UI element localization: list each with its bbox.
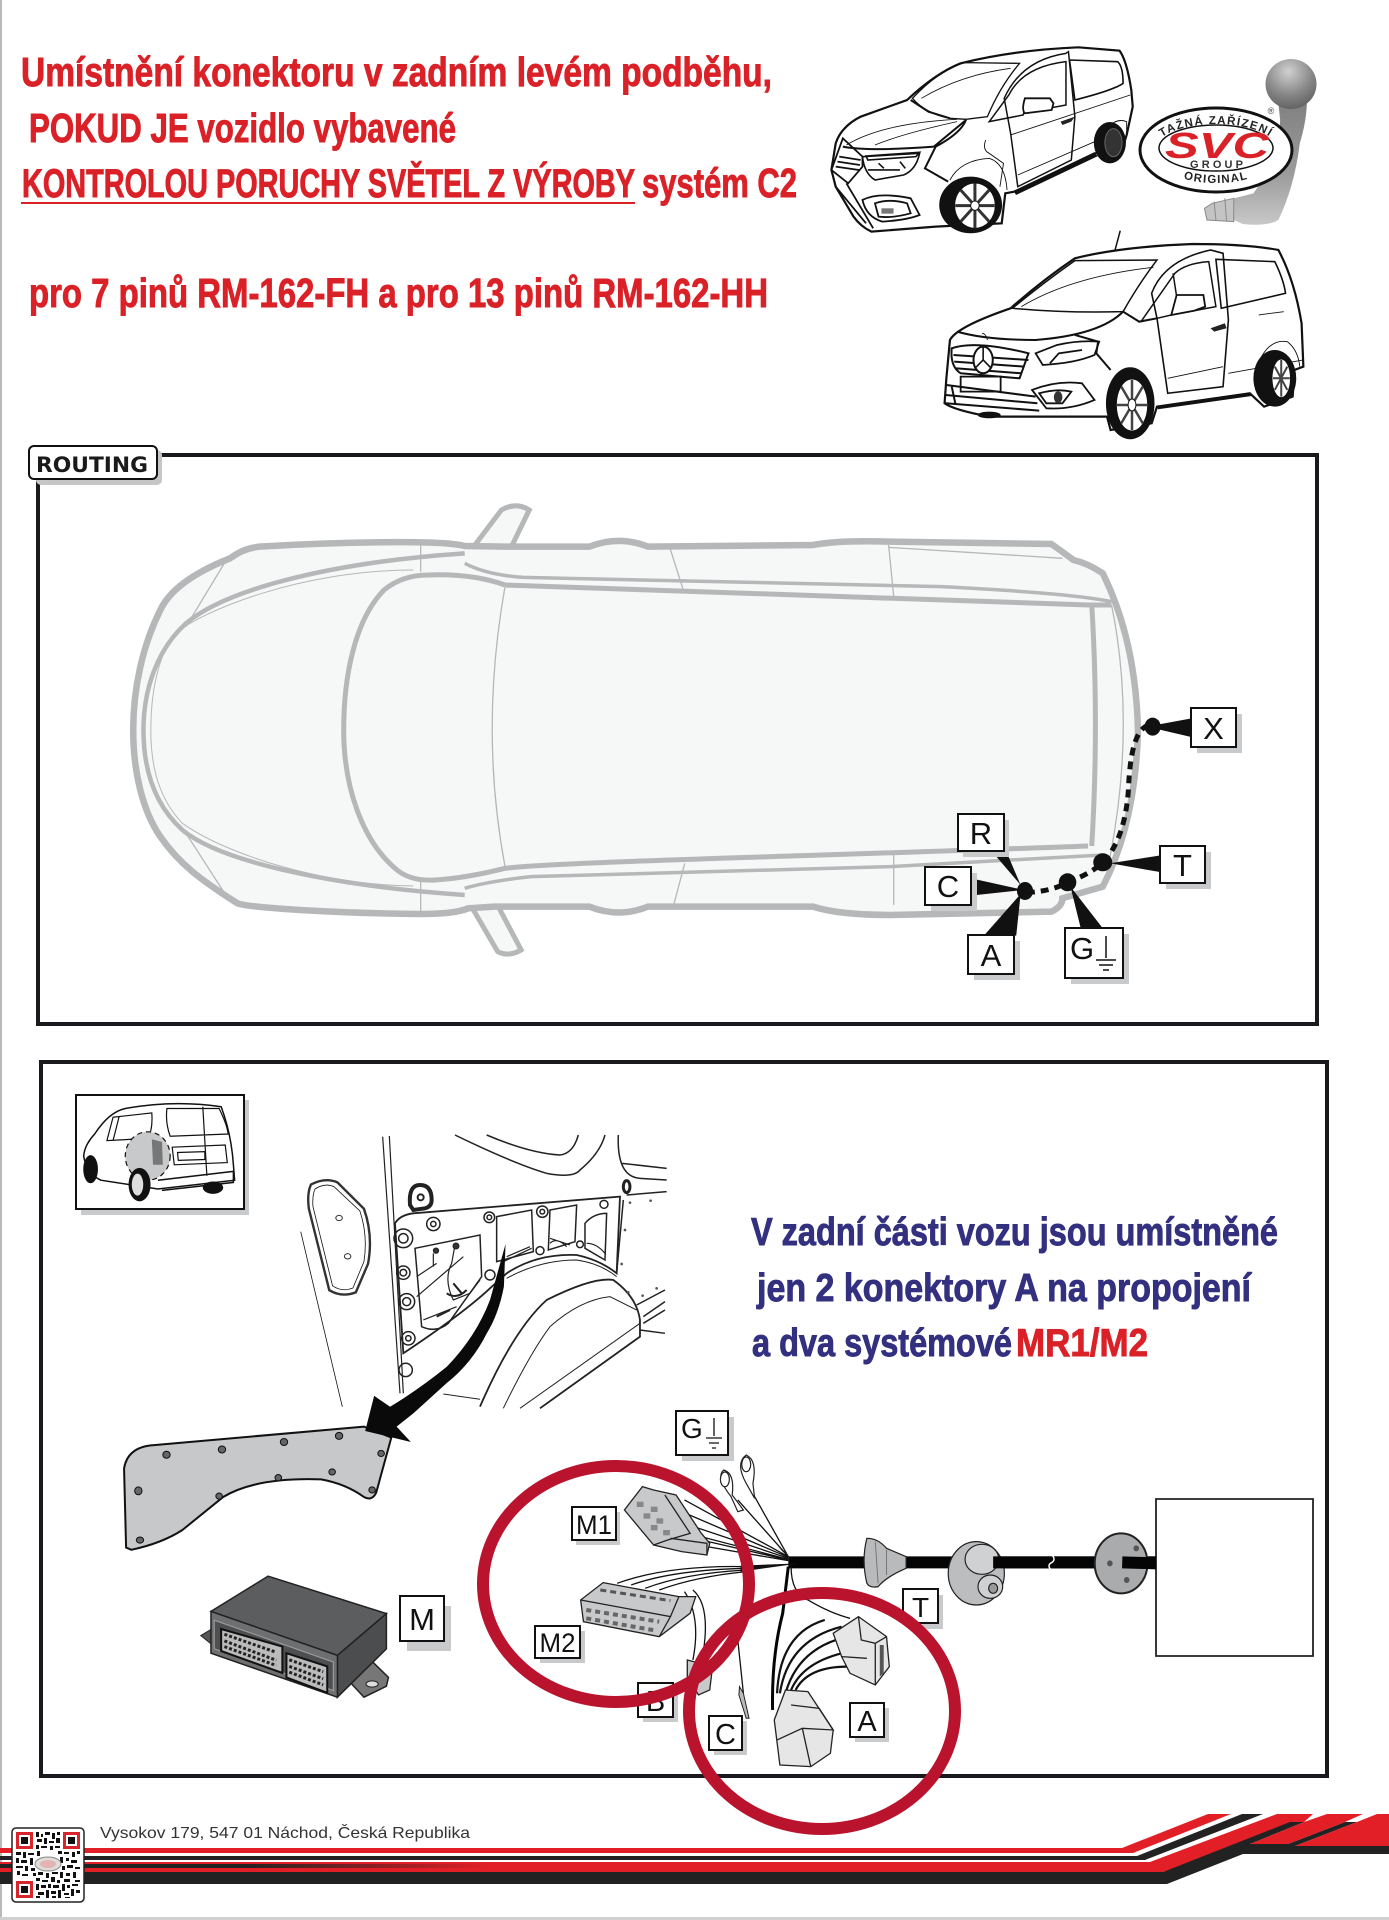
headlamp	[862, 152, 920, 180]
roof panel	[344, 575, 1112, 880]
highlight ellipse: M1 and M2 connectors	[483, 1466, 749, 1702]
description line 3: a dva systémové	[752, 1322, 1012, 1365]
SVC badge: ORIGINAL	[1184, 172, 1248, 183]
logo: SVC tow bar	[1138, 59, 1316, 225]
label M2: M2	[540, 1628, 576, 1658]
title line 3 suffix: systém C2	[642, 160, 797, 206]
label T: T	[1173, 848, 1192, 883]
connector M2	[581, 1583, 696, 1637]
top view of vehicle	[133, 506, 1192, 954]
label T	[1160, 846, 1211, 889]
wires to A and T	[772, 1567, 788, 1710]
rear wheel	[1253, 350, 1296, 407]
tow bar neck	[1204, 100, 1307, 225]
title line 2: POKUD JE vozidlo vybavené	[29, 105, 456, 151]
label B: B	[646, 1686, 665, 1718]
connector M1	[624, 1487, 710, 1555]
description highlight: MR1/M2	[1016, 1322, 1148, 1365]
grille	[831, 138, 862, 183]
label G ground: G	[1070, 931, 1094, 966]
hook	[410, 1185, 432, 1210]
label A: A	[981, 938, 1002, 973]
label R	[958, 814, 1009, 857]
panel: routing	[29, 446, 1317, 1024]
description line 1: V zadní části vozu jsou umístněné	[751, 1211, 1278, 1254]
label X	[1191, 708, 1242, 753]
title line 1: Umístnění konektoru v zadním levém podběhu,	[21, 49, 772, 95]
mounting plate	[1095, 1533, 1147, 1593]
label G ground	[1065, 928, 1129, 984]
subtitle part numbers: pro 7 pinů RM-162-FH a pro 13 pinů RM-162-HH	[29, 270, 768, 316]
SVC badge: SVC	[1165, 125, 1270, 166]
tow ball	[1266, 59, 1316, 109]
wheel arch	[480, 1280, 640, 1408]
SVC badge: ®	[1268, 106, 1275, 116]
label M1	[572, 1507, 620, 1545]
thin seams	[186, 545, 1123, 912]
label B	[638, 1683, 678, 1722]
connector B	[687, 1660, 713, 1695]
front-left tyre	[978, 412, 1001, 418]
vehicle interior detail	[383, 1135, 667, 1408]
routing frame	[38, 455, 1317, 1024]
label C: C	[937, 869, 959, 904]
label R: R	[970, 816, 992, 851]
label G ground	[676, 1411, 734, 1461]
main cable	[788, 1556, 1156, 1568]
title	[21, 49, 797, 316]
grille	[951, 345, 1028, 378]
routing tag: ROUTING	[36, 453, 148, 477]
body outline	[133, 541, 1138, 915]
label C: C	[715, 1719, 736, 1751]
SVC badge: GROUP	[1190, 159, 1243, 171]
windscreen	[143, 553, 465, 895]
front wheel	[1106, 367, 1155, 439]
panel: installation	[41, 1062, 1327, 1776]
wire route	[1025, 725, 1148, 893]
description text	[751, 1211, 1278, 1365]
tapered grommet	[864, 1538, 906, 1587]
headlamp	[1036, 341, 1099, 365]
terminal C	[739, 1687, 749, 1718]
connector T plug	[833, 1617, 889, 1685]
arrow: panel removal	[365, 1244, 506, 1442]
SVC badge	[1138, 106, 1294, 194]
control module M	[201, 1576, 388, 1697]
location dots and pointers	[971, 718, 1192, 936]
round grommet	[948, 1542, 1004, 1605]
label T	[903, 1589, 943, 1629]
label X: X	[1203, 711, 1224, 746]
bundle fan	[777, 1547, 797, 1562]
installation frame	[41, 1062, 1327, 1776]
front wheel	[939, 177, 1002, 233]
QR code	[12, 1828, 84, 1902]
label M	[400, 1596, 451, 1651]
label G ground: G	[681, 1413, 703, 1444]
car illustration: Mercedes Citan	[945, 231, 1303, 439]
grey interior panel	[124, 1427, 391, 1550]
SVC badge: TAŽNÁ ZAŘÍZENÍ	[1158, 114, 1275, 136]
description line 2: jen 2 konektory A na propojení	[756, 1267, 1252, 1310]
rear wheel	[1094, 122, 1126, 163]
label C	[709, 1716, 747, 1755]
inset: rear view of van	[76, 1095, 249, 1215]
title line 3 underlined: KONTROLOU PORUCHY SVĚTEL Z VÝROBY	[22, 160, 635, 206]
car illustration: Renault Kangoo	[831, 47, 1133, 233]
label A	[850, 1703, 889, 1742]
label A: A	[857, 1706, 877, 1738]
side trim capsule	[301, 1180, 370, 1407]
label C	[925, 867, 977, 911]
label M2	[535, 1626, 585, 1663]
label T: T	[912, 1592, 929, 1623]
wiring harness	[581, 1455, 1156, 1767]
highlight ellipse: A connector	[689, 1593, 955, 1829]
mirrors	[465, 506, 529, 560]
routing tag	[29, 446, 162, 485]
label M: M	[409, 1602, 435, 1637]
footer stripes	[0, 1814, 1389, 1884]
label A	[968, 935, 1020, 980]
upper trim	[455, 1135, 667, 1333]
label M1: M1	[576, 1510, 612, 1540]
address: Vysokov 179, 547 01 Náchod, Česká Republika	[100, 1823, 470, 1842]
connector A plug	[774, 1690, 833, 1767]
white box	[1156, 1499, 1313, 1656]
ring terminals	[720, 1455, 755, 1512]
